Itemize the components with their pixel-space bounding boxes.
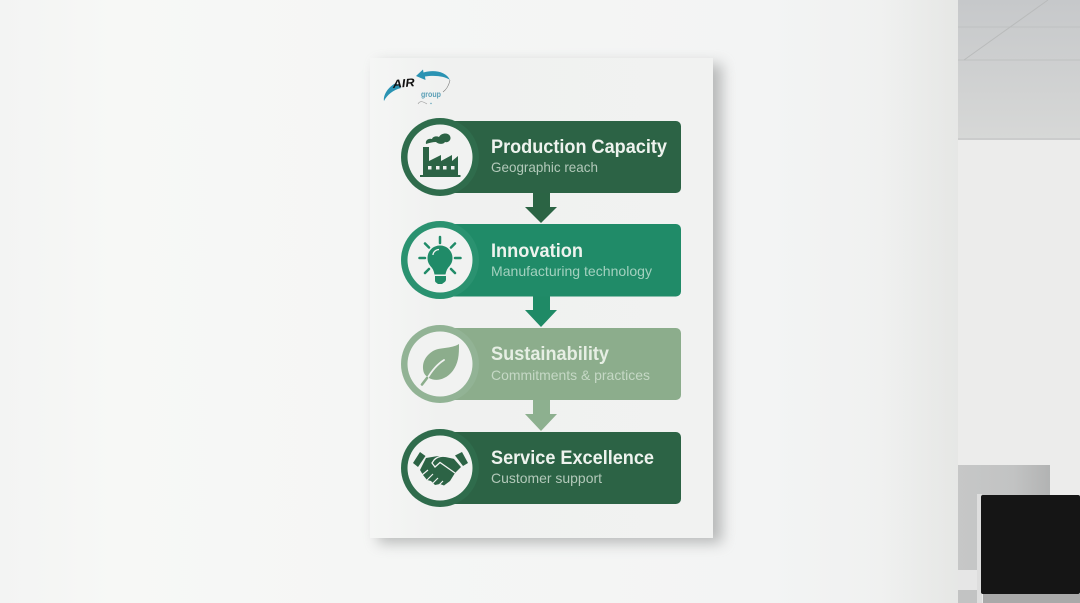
bar 4 [440, 432, 681, 504]
bar 2 [440, 224, 681, 296]
title 1: Production Capacity [491, 137, 667, 158]
icon: handshake [413, 452, 468, 486]
arrow 3 [525, 399, 557, 431]
step 4: Service Excellence [401, 429, 681, 507]
step 1: Production Capacity [401, 118, 681, 223]
arrow 1 [525, 192, 557, 223]
icon: factory [420, 133, 460, 177]
subtitle 3: Commitments & practices [491, 367, 650, 383]
background: ceiling and side room [958, 0, 1080, 603]
title 3: Sustainability [491, 344, 609, 365]
bar 1 [440, 121, 681, 193]
arrow 2 [525, 295, 557, 327]
logo wordmark AIR: AIR [391, 77, 416, 91]
step 3: Sustainability [401, 325, 681, 431]
logo swoosh [384, 83, 401, 101]
badge 3 [401, 325, 479, 403]
icon: leaf [422, 344, 459, 384]
logo wordmark group: group [421, 90, 441, 99]
logo: AIR group [384, 70, 450, 104]
badge 4 [401, 429, 479, 507]
subtitle 4: Customer support [491, 470, 602, 486]
subtitle 2: Manufacturing technology [491, 263, 652, 279]
poster shadow [378, 64, 722, 543]
subtitle 1: Geographic reach [491, 159, 598, 175]
background: desktop monitor and laptop [958, 465, 1080, 603]
poster board [370, 58, 713, 538]
bar 3 [440, 328, 681, 400]
icon: light bulb [420, 237, 460, 284]
title 4: Service Excellence [491, 448, 654, 469]
badge 1 [401, 118, 479, 196]
step 2: Innovation [401, 221, 681, 327]
title 2: Innovation [491, 241, 583, 262]
badge 2 [401, 221, 479, 299]
